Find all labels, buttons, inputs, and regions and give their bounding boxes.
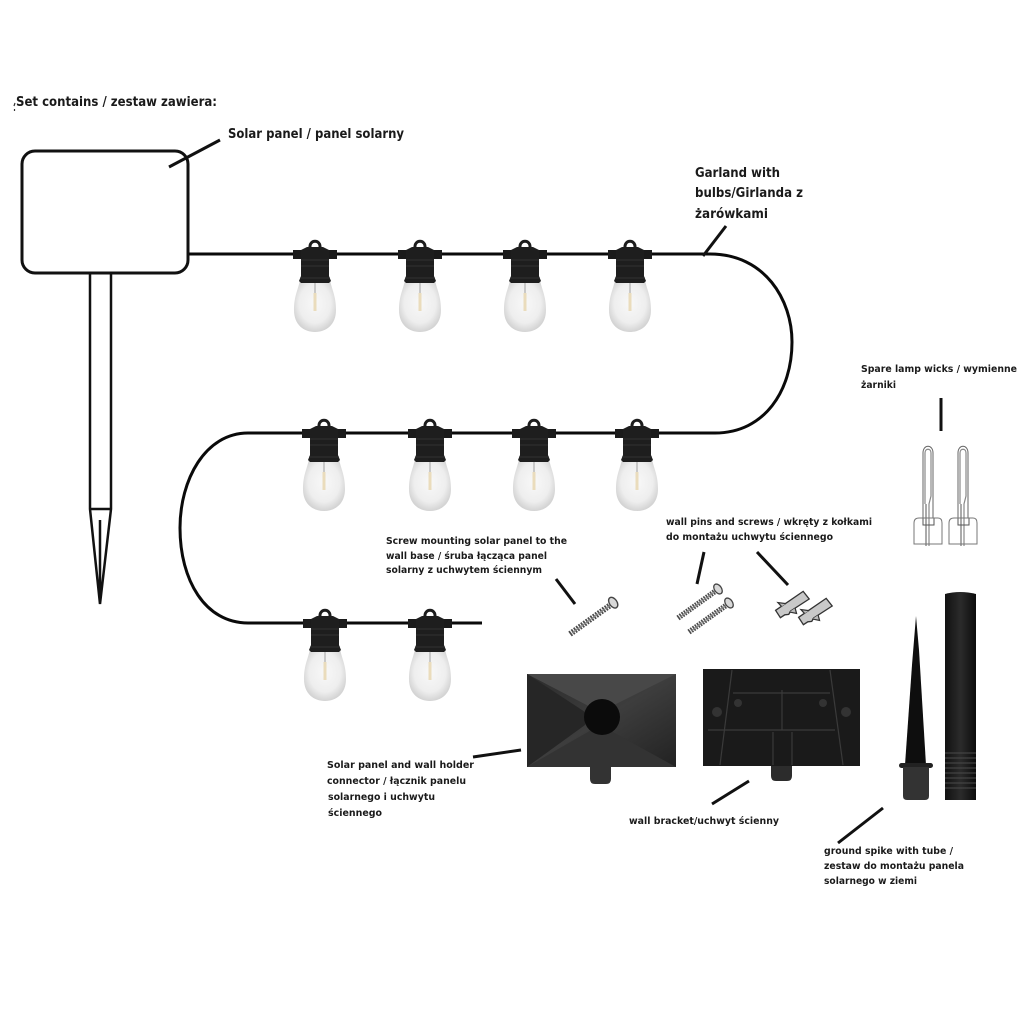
title: Set contains / zestaw zawiera: (16, 94, 217, 110)
icon: screw (570, 596, 620, 634)
garland label line 2: bulbs/Girlanda z (695, 186, 803, 201)
wall pins label: wall pins and screws / wkręty z kołkami (666, 517, 872, 528)
connector plate (527, 674, 676, 784)
icon: spare wicks (914, 446, 977, 546)
garland label line 3: żarówkami (695, 207, 768, 222)
tube (945, 592, 976, 800)
panel outline (22, 151, 188, 273)
ground spike label line 3: solarnego w ziemi (824, 876, 917, 887)
ground spike label line 2: zestaw do montażu panela (824, 861, 964, 872)
connector label line 4: ściennego (328, 807, 382, 819)
wall bracket (703, 669, 860, 781)
connector label line 2: connector / łącznik panelu (327, 776, 466, 787)
screw label: Screw mounting solar panel to the (386, 536, 567, 547)
garland cord (180, 254, 792, 623)
ground spike (899, 616, 933, 800)
arrow: wall plugs (757, 552, 788, 585)
arrow: connector (473, 750, 521, 757)
garland bulbs (293, 241, 659, 701)
ground spike label: ground spike with tube / (824, 846, 953, 857)
solar panel label: Solar panel / panel solarny (228, 127, 404, 142)
arrow: screw (556, 579, 575, 604)
arrow: garland (703, 226, 726, 256)
connector label line 3: solarnego i uchwytu (328, 792, 435, 803)
stake (90, 273, 111, 604)
arrow: ground spike (838, 808, 883, 843)
title stray mark (14, 103, 15, 111)
screw label line 2: wall base / śruba łącząca panel (386, 550, 547, 562)
icon: wall screws (678, 582, 735, 632)
solar panel with stake (22, 151, 188, 604)
arrow: wall screws (697, 552, 704, 584)
connector label: Solar panel and wall holder (327, 760, 474, 771)
arrow: solar panel (169, 140, 220, 167)
wall bracket label: wall bracket/uchwyt ścienny (629, 815, 779, 827)
garland label: Garland with (695, 166, 780, 181)
wall pins label line 2: do montażu uchwytu ściennego (666, 531, 833, 543)
spare wicks label: Spare lamp wicks / wymienne (861, 364, 1017, 375)
spare wicks label line 2: żarniki (861, 380, 896, 391)
arrow: wall bracket (712, 781, 749, 804)
screw label line 3: solarny z uchwytem ściennym (386, 564, 542, 576)
arrow: spare wicks (940, 398, 942, 431)
icon: wall plugs (773, 587, 835, 629)
